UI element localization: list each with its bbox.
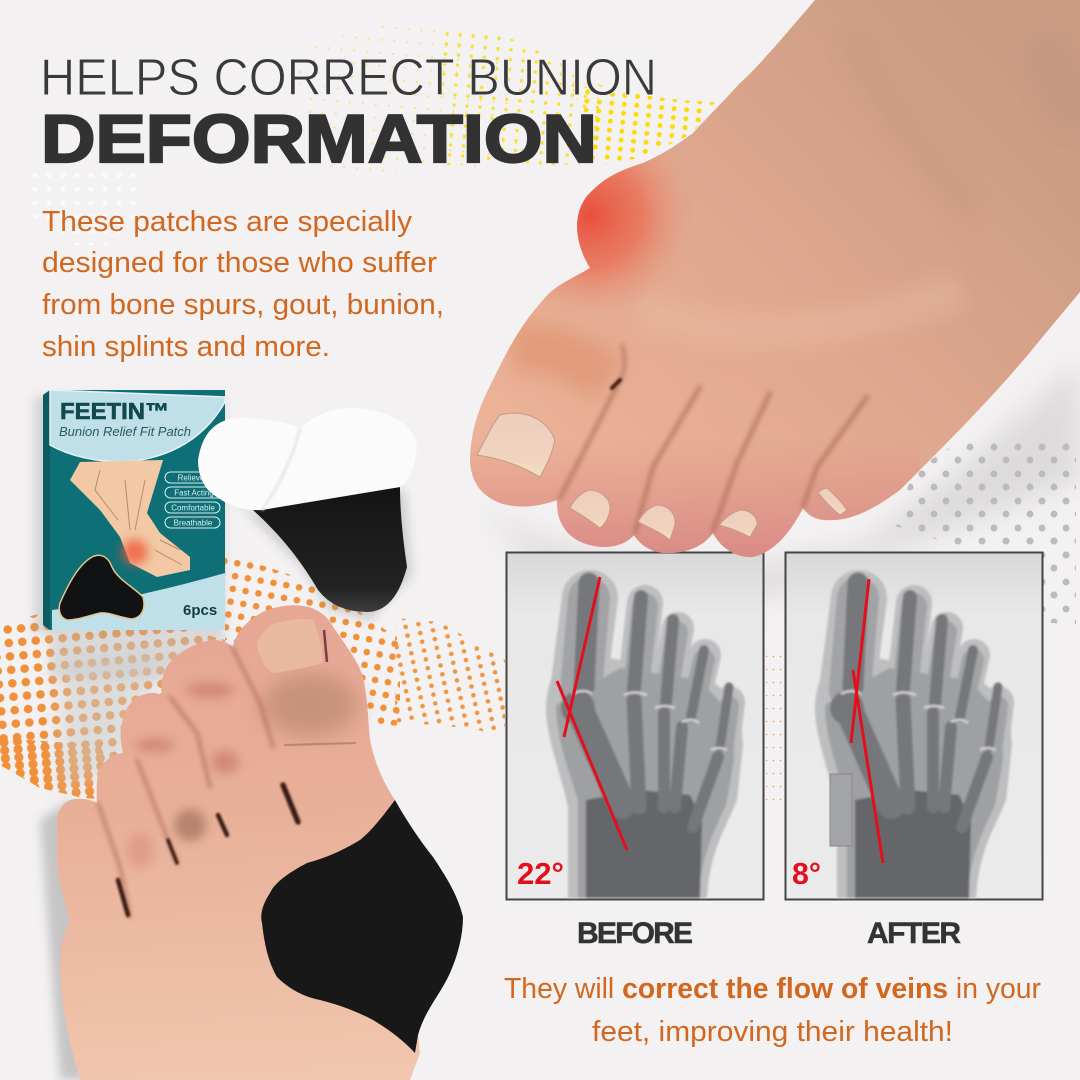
box feature pills: Comfortable: [171, 504, 215, 512]
after frame: [786, 552, 1042, 900]
box reflection and soft shadows: [40, 634, 225, 1080]
decorative dots: top yellow wave: [293, 20, 715, 175]
big foot shadow: [480, 360, 1080, 600]
before measurement lines: [557, 577, 627, 850]
after angle: 8°: [792, 856, 821, 891]
before frame: [506, 552, 764, 900]
toe shading: [98, 647, 358, 917]
right small dots: [395, 618, 505, 737]
patch backing fold: [262, 428, 300, 510]
box feature pills: Fast Acting: [174, 488, 214, 498]
product box: [34, 390, 225, 634]
middle tiny dots: [766, 650, 785, 805]
before foot bones: [546, 583, 743, 898]
foot body: [470, 0, 1080, 557]
box feature pills: [165, 472, 225, 528]
loose patch: [198, 408, 417, 620]
label: before: BEFORE: [577, 917, 693, 950]
decorative dots: grey halftone: [892, 438, 1076, 625]
photo: foot with bunion: [460, 0, 1080, 560]
patch white backing: [198, 408, 417, 510]
foot tendons and shading: [505, 287, 952, 399]
dark web of big toe: [612, 380, 620, 388]
box shadow: [34, 396, 224, 634]
patch black face: [253, 487, 407, 612]
box spine: [43, 390, 50, 630]
box count: 6pcs: [183, 602, 217, 619]
left large dots: [0, 612, 225, 800]
black patch on foot: [261, 800, 463, 1053]
bunion redness: [547, 156, 676, 304]
toe knuckle redness: [126, 682, 239, 868]
decorative dots: white cluster: [25, 172, 140, 245]
toenail: [257, 619, 323, 673]
caption: They will correct the flow of veins in your: [504, 973, 1041, 1005]
soft toe gaps: [560, 345, 867, 533]
intro text: shin splints and more.: [42, 331, 330, 363]
nail edge: [324, 630, 327, 662]
big toe skin fold: [285, 743, 355, 745]
box bottom panel: [52, 573, 225, 630]
box product name: FEETIN™: [60, 398, 169, 424]
foot body: [57, 605, 420, 1080]
caption: feet, improving their health!: [592, 1016, 953, 1048]
x-ray before panel: [506, 552, 764, 900]
after patch: [830, 774, 852, 846]
toe tip tint: [470, 463, 918, 558]
x-ray after panel: [786, 552, 1042, 900]
box bunion glow: [122, 539, 148, 565]
toenails: [477, 413, 847, 540]
soft shade between toes: [98, 647, 273, 917]
caption: [504, 973, 1041, 1048]
decorative dots: orange wave: [0, 553, 785, 805]
after measurement lines: [851, 579, 883, 863]
title line 2: DEFORMATION: [41, 101, 597, 177]
foot colour overlays: [470, 156, 952, 558]
box feature pills: Breathable: [174, 518, 213, 528]
toe separations: [560, 345, 867, 533]
intro text: These patches are specially: [42, 206, 413, 238]
dark toe gaps: [118, 785, 298, 915]
title: [40, 49, 657, 177]
box foot illustration: [70, 460, 190, 577]
title line 1: HELPS CORRECT BUNION: [40, 49, 657, 107]
label: after: AFTER: [867, 917, 961, 950]
upper centre dots: [225, 553, 400, 726]
box patch image: [59, 555, 144, 620]
intro text: [42, 206, 444, 363]
box subtitle: Bunion Relief Fit Patch: [59, 425, 191, 439]
photo: foot wearing patch: [57, 605, 463, 1080]
intro text: designed for those who suffer: [42, 247, 438, 279]
patch shadow: [205, 470, 412, 620]
box front: [50, 390, 225, 630]
big toe knuckle shading: [262, 673, 358, 737]
box top panel: [50, 390, 225, 462]
before angle: 22°: [517, 856, 564, 891]
after foot bones: [815, 583, 1012, 898]
box feature pills: Relieves: [178, 474, 208, 482]
left dense stripes: [0, 738, 125, 800]
box foot finger lines: [95, 470, 182, 565]
intro text: from bone spurs, gout, bunion,: [42, 289, 444, 321]
